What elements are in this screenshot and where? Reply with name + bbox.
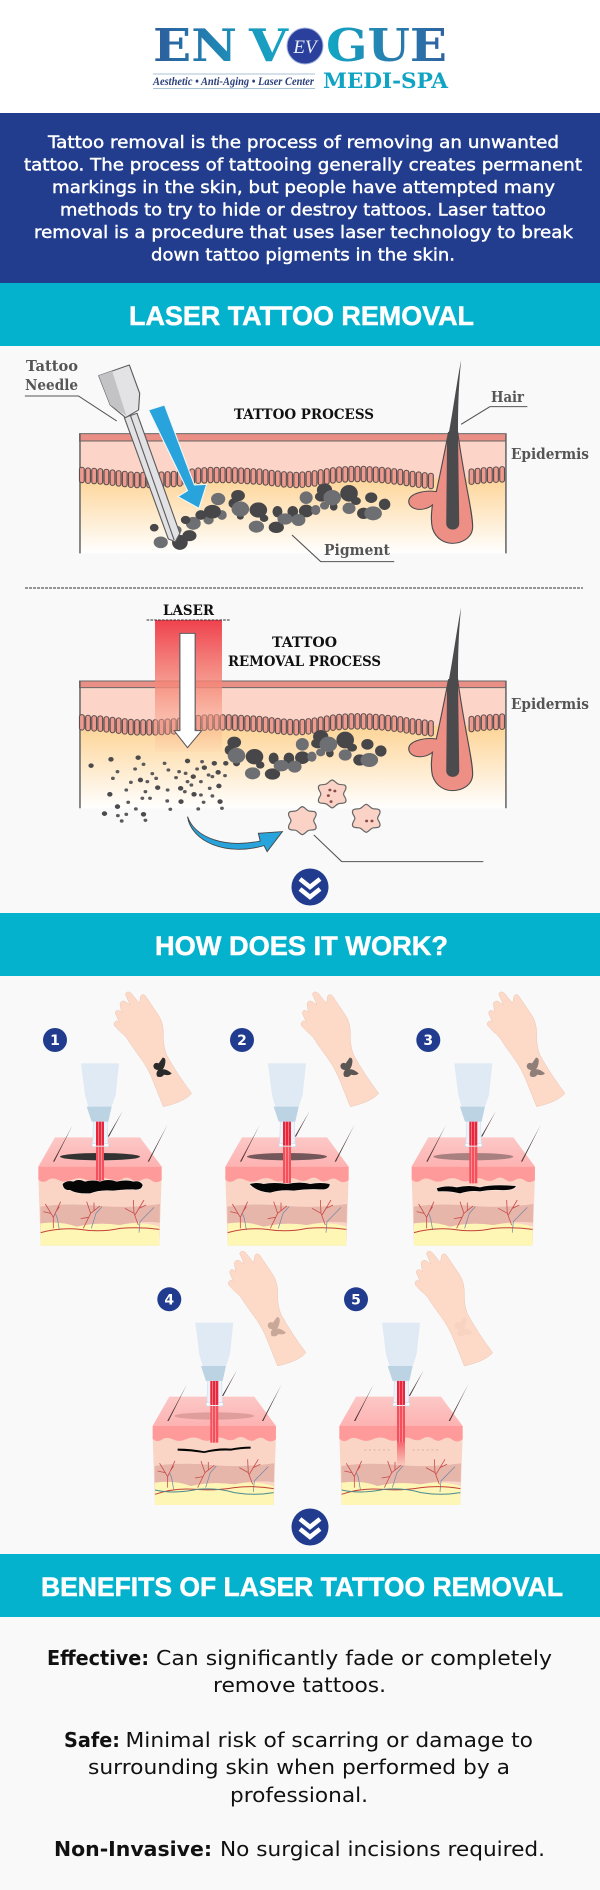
step 5 <box>339 1251 493 1505</box>
logo subtitle: MEDI-SPA <box>323 68 449 93</box>
ink in skin <box>437 1185 516 1193</box>
diagram: tattoo process <box>25 357 589 562</box>
intro text <box>24 133 582 266</box>
skin cross-section <box>80 607 506 862</box>
number badge <box>416 1028 440 1052</box>
pigment blobs <box>226 731 385 779</box>
ink in skin <box>250 1183 330 1193</box>
number badge: 3 <box>423 1033 433 1049</box>
heading: how does it work: HOW DOES IT WORK? <box>155 931 448 961</box>
number badge <box>157 1287 181 1311</box>
logo wordmark: GUE <box>326 19 447 72</box>
label: hair: Hair <box>491 388 525 406</box>
arrow: needle direction <box>148 405 207 508</box>
benefit: safe: surrounding skin when performed by a <box>88 1755 510 1779</box>
butterfly tattoo <box>454 1317 473 1336</box>
laser beam <box>155 620 222 752</box>
icon: tattoo needle <box>99 365 180 542</box>
diagram: tattoo removal process <box>80 603 589 862</box>
logo wordmark <box>153 19 447 72</box>
icon: chevrons down <box>292 1508 328 1546</box>
label: tattoo removal process: REMOVAL PROCESS <box>228 654 381 670</box>
arrow: curved blue <box>188 817 282 852</box>
heading: benefits: BENEFITS OF LASER TATTOO REMOVAL <box>41 1572 563 1602</box>
panel: intro <box>0 113 600 283</box>
beam fade <box>397 1443 405 1467</box>
label: tattoo removal process <box>228 635 381 670</box>
label: laser: LASER <box>163 603 214 619</box>
arrow: laser direction <box>174 633 202 748</box>
logo wordmark: EN <box>153 19 237 72</box>
label: epidermis: Epidermis <box>511 695 589 713</box>
heading: benefits <box>0 1554 600 1617</box>
benefit: effective: Can significantly fade or completely <box>156 1646 552 1670</box>
heading: laser tattoo removal: LASER TATTOO REMOVAL <box>129 301 474 331</box>
butterfly tattoo <box>153 1058 172 1077</box>
benefit: safe: professional. <box>230 1783 368 1807</box>
step 1 <box>38 992 192 1246</box>
icon: chevrons down <box>292 868 328 906</box>
logo tagline: Aesthetic • Anti-Aging • Laser Center <box>152 76 314 88</box>
benefit: effective: Effective: <box>47 1646 149 1670</box>
intro text: removal is a procedure that uses laser technology to break <box>34 223 573 243</box>
logo emblem <box>287 28 323 64</box>
faint ink traces <box>364 1449 439 1451</box>
label: tattoo needle: Tattoo <box>26 357 78 375</box>
label: pigment: Pigment <box>324 541 390 559</box>
number badge: 1 <box>50 1033 60 1049</box>
benefit: safe <box>64 1728 533 1807</box>
intro text: Tattoo removal is the process of removing an unwanted <box>47 133 559 153</box>
number badge: 4 <box>164 1292 174 1308</box>
number badge <box>43 1028 67 1052</box>
logo emblem: EV <box>292 37 319 58</box>
intro text: tattoo. The process of tattooing generally creates permanent <box>24 156 582 176</box>
macrophage cells <box>289 780 380 835</box>
step 3 <box>412 992 565 1246</box>
butterfly tattoo <box>340 1058 359 1077</box>
intro text: down tattoo pigments in the skin. <box>151 246 455 266</box>
skin cross-section <box>25 360 527 562</box>
step 2 <box>225 992 379 1246</box>
butterfly tattoo <box>527 1058 545 1077</box>
label: tattoo process: TATTOO PROCESS <box>234 407 374 423</box>
pigment blobs <box>151 484 389 549</box>
ink in skin <box>63 1180 143 1193</box>
benefit: effective: remove tattoos. <box>213 1673 386 1697</box>
label: tattoo removal process: TATTOO <box>272 635 337 651</box>
number badge <box>344 1287 368 1311</box>
logo wordmark: V <box>248 19 289 72</box>
label: tattoo needle: Needle <box>25 376 78 394</box>
number badge <box>230 1028 254 1052</box>
divider <box>25 587 583 589</box>
benefit: effective <box>47 1646 552 1697</box>
number badge: 2 <box>237 1033 247 1049</box>
intro text: methods to try to hide or destroy tattoos. Laser tattoo <box>60 200 546 220</box>
intro text: markings in the skin, but people have attempted many <box>52 178 555 198</box>
ink in skin <box>178 1447 251 1453</box>
heading: how does it work <box>0 913 600 976</box>
label: epidermis: Epidermis <box>511 445 589 463</box>
benefit: safe: Safe: <box>64 1728 120 1752</box>
header: logo <box>0 0 600 113</box>
number badge: 5 <box>351 1292 361 1308</box>
benefit: safe: Minimal risk of scarring or damage to <box>126 1728 533 1752</box>
benefit: non-invasive: No surgical incisions required. <box>220 1837 545 1861</box>
shattered pigment particles <box>91 758 226 821</box>
butterfly tattoo <box>268 1317 286 1336</box>
heading: laser tattoo removal <box>0 283 600 346</box>
step 4 <box>153 1251 306 1505</box>
label: tattoo needle <box>25 357 78 394</box>
benefit: non-invasive: Non-Invasive: <box>54 1837 212 1861</box>
leader lines <box>25 396 527 562</box>
benefit: non-invasive <box>54 1837 545 1861</box>
